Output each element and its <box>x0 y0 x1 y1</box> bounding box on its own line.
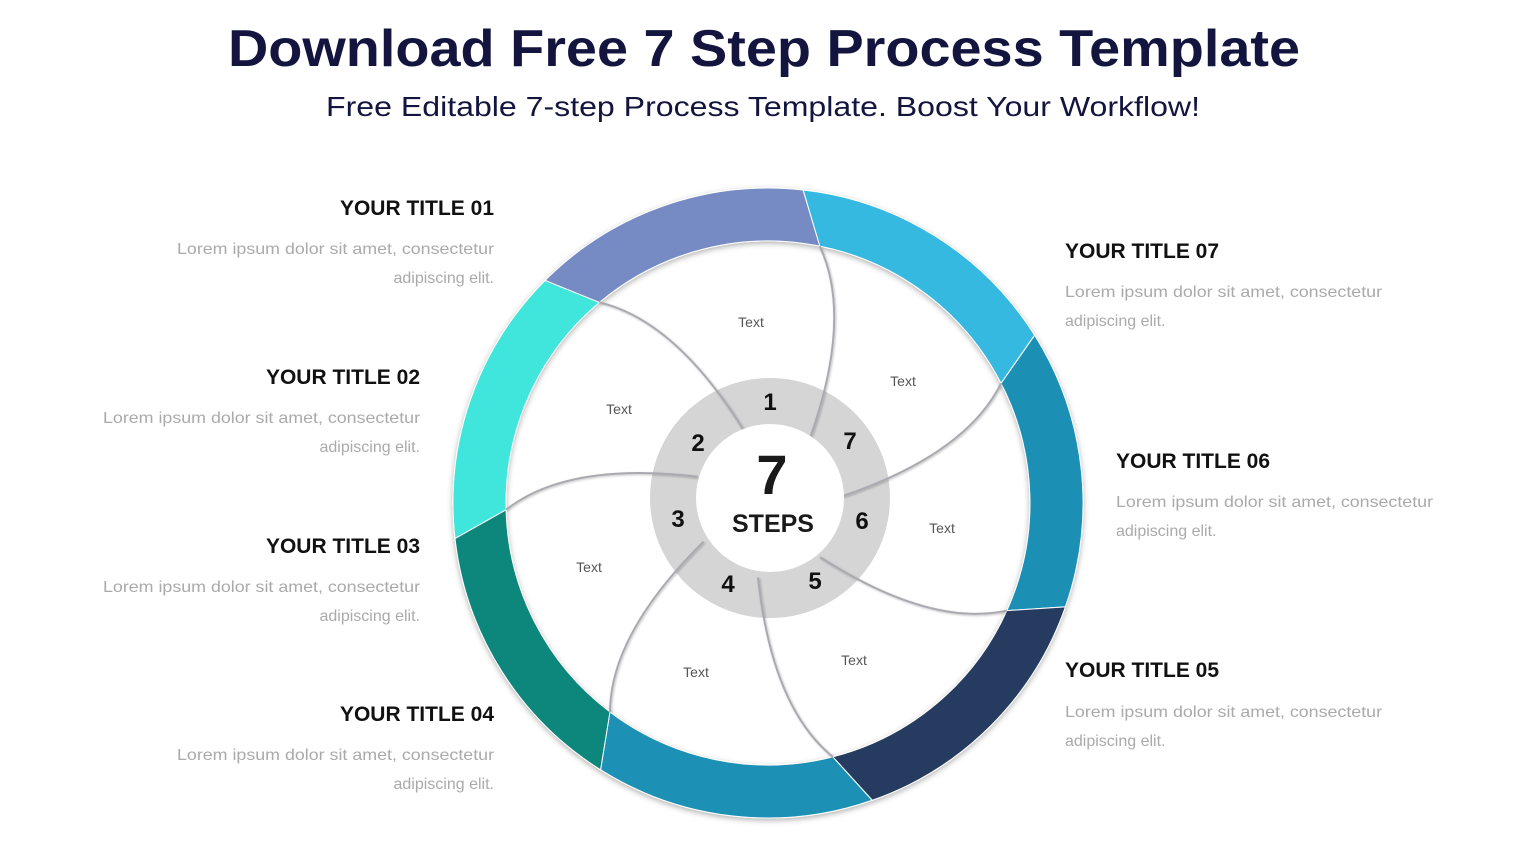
step numbers: 7 <box>843 428 857 455</box>
step numbers: 1 <box>763 389 777 416</box>
segment text labels <box>576 314 955 680</box>
center circle <box>696 424 844 572</box>
text block 01: adipiscing elit. <box>394 270 494 287</box>
step numbers: 3 <box>671 506 685 533</box>
segment text labels: Text <box>606 401 632 417</box>
text block 04: YOUR TITLE 04 <box>340 703 494 726</box>
text block 03 <box>103 535 421 625</box>
text block 07: YOUR TITLE 07 <box>1065 240 1219 263</box>
text block 01 <box>177 197 495 287</box>
text block 07: adipiscing elit. <box>1065 313 1166 330</box>
text block 04: Lorem ipsum dolor sit amet, consectetur <box>177 747 495 764</box>
step numbers: 2 <box>691 430 705 457</box>
segment text labels: Text <box>738 314 764 330</box>
text block 05: Lorem ipsum dolor sit amet, consectetur <box>1065 704 1383 721</box>
step numbers <box>671 389 869 598</box>
segment text labels: Text <box>890 373 916 389</box>
text block 01: Lorem ipsum dolor sit amet, consectetur <box>177 241 495 258</box>
step numbers: 6 <box>855 508 869 535</box>
text block 06: YOUR TITLE 06 <box>1116 450 1270 473</box>
center circle: STEPS <box>732 510 814 538</box>
text block 03: YOUR TITLE 03 <box>266 535 420 558</box>
text block 06: adipiscing elit. <box>1116 523 1216 540</box>
center circle: 7 <box>756 443 788 506</box>
ring segments <box>392 106 1166 864</box>
text block 05: YOUR TITLE 05 <box>1065 659 1219 682</box>
step numbers: 5 <box>808 568 822 595</box>
text block 06 <box>1116 450 1434 540</box>
gray ring <box>650 378 890 618</box>
text block 01: YOUR TITLE 01 <box>340 197 494 220</box>
text block 03: Lorem ipsum dolor sit amet, consectetur <box>103 579 421 596</box>
text block 05: adipiscing elit. <box>1065 733 1166 750</box>
text block 07 <box>1065 240 1383 330</box>
segment text labels: Text <box>576 559 602 575</box>
subtitle: Free Editable 7-step Process Template. Boost Your Workflow! <box>326 91 1200 122</box>
segment text labels: Text <box>841 652 867 668</box>
spiral dividers <box>503 246 1014 765</box>
text block 03: adipiscing elit. <box>320 608 420 625</box>
text block 06: Lorem ipsum dolor sit amet, consectetur <box>1116 494 1434 511</box>
text block 07: Lorem ipsum dolor sit amet, consectetur <box>1065 284 1383 301</box>
text block 02: adipiscing elit. <box>320 439 420 456</box>
text block 04: adipiscing elit. <box>394 776 494 793</box>
text block 02: Lorem ipsum dolor sit amet, consectetur <box>103 410 421 427</box>
text block 02: YOUR TITLE 02 <box>266 366 420 389</box>
segment text labels: Text <box>929 520 955 536</box>
step numbers: 4 <box>721 571 735 598</box>
text block 04 <box>177 703 495 793</box>
segment text labels: Text <box>683 664 709 680</box>
text block 05 <box>1065 659 1383 750</box>
title: Download Free 7 Step Process Template <box>228 20 1300 78</box>
text block 02 <box>103 366 421 456</box>
